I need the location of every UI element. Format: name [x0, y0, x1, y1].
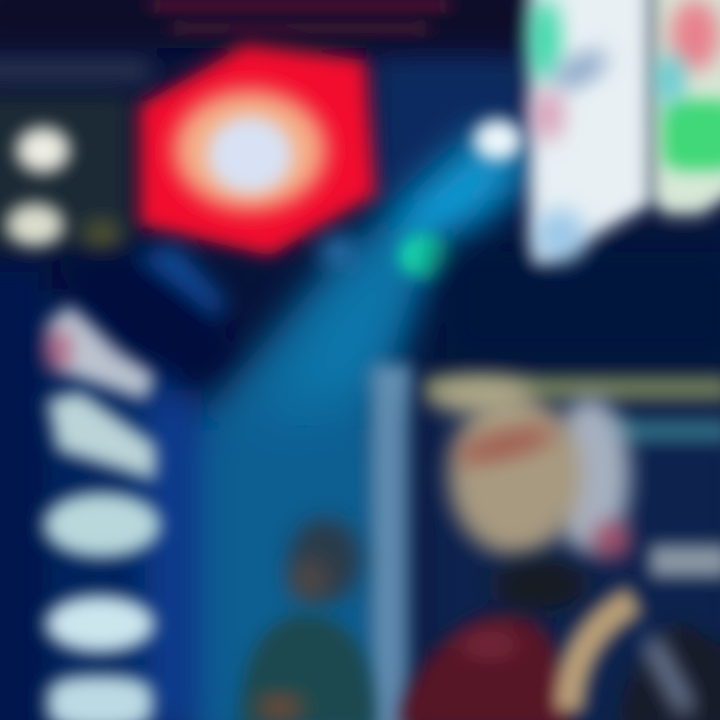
top dark ceiling: [0, 0, 530, 84]
right shelves background: [435, 386, 720, 720]
pale column: [390, 383, 394, 720]
background wall and light beam: [185, 50, 530, 720]
light: lower: [7, 204, 63, 246]
screen: colourful panel: [656, 0, 720, 197]
left shelf column: [0, 290, 176, 720]
shelf item 1: [48, 305, 155, 400]
screen: white panel: [529, 0, 650, 265]
shelf item 2: [48, 392, 155, 480]
bright spot and green light: [320, 120, 522, 278]
icon: red hexagon sign: [140, 45, 375, 256]
person: left figure: [250, 518, 365, 720]
red stripes: [150, 0, 450, 33]
left dark panel with lights: [0, 95, 130, 250]
shelf item 5: [58, 686, 142, 720]
person: right figure with hat: [410, 377, 720, 720]
light: upper: [17, 128, 69, 172]
dark awning: [50, 245, 235, 380]
light: small amber: [84, 221, 120, 249]
shelf item 4: [46, 596, 154, 652]
shelf item 3: [44, 493, 160, 557]
right dark band: [460, 265, 720, 345]
